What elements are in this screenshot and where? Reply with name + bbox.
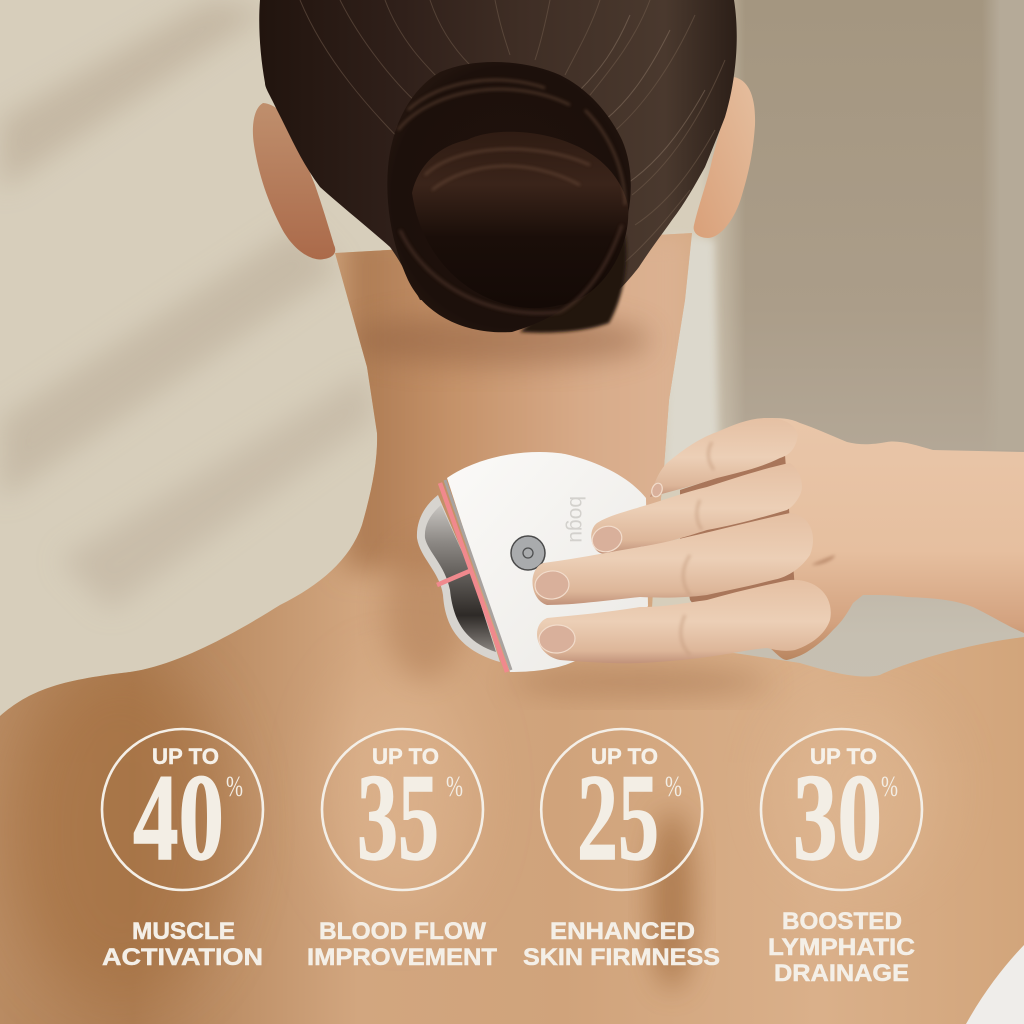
towel corner (966, 945, 1024, 1024)
white body (447, 452, 648, 672)
percent sign: % (226, 770, 243, 803)
badge ring (541, 729, 702, 890)
up to label: UP TO (152, 744, 219, 769)
badge ring (322, 729, 483, 890)
stat: 40% muscle activation (102, 729, 263, 971)
finger gaps shadow (680, 455, 795, 640)
power button (511, 536, 545, 570)
caption (768, 908, 915, 987)
forearm and hand back (720, 418, 1024, 660)
hair bun (387, 62, 631, 332)
stat: 25% enhanced skin firmness (523, 729, 720, 971)
caption: ENHANCED (550, 918, 695, 945)
caption: DRAINAGE (774, 960, 909, 987)
knuckle creases (681, 442, 714, 655)
device (417, 452, 648, 672)
device logo: bogu (565, 496, 588, 543)
nape tuft (520, 235, 627, 333)
value: 30 (793, 749, 882, 886)
ear left (253, 103, 335, 259)
up to label: UP TO (591, 744, 658, 769)
value: 40 (133, 749, 224, 886)
caption: MUSCLE (132, 918, 235, 945)
value: 35 (357, 749, 439, 886)
ear right (694, 77, 755, 238)
stat: 35% blood flow improvement (307, 729, 497, 971)
grey seam (445, 480, 511, 670)
caption (102, 918, 263, 971)
fingers (532, 418, 831, 663)
caption (307, 918, 497, 971)
hair (259, 0, 737, 333)
caption: IMPROVEMENT (307, 944, 497, 971)
percent sign: % (665, 770, 682, 803)
top finger (650, 418, 798, 497)
fourth finger (537, 580, 831, 663)
metal mirror surface (425, 505, 496, 652)
caption (523, 918, 720, 971)
hair strands (300, 0, 725, 262)
pink cross bar (437, 570, 472, 585)
up to label: UP TO (810, 744, 877, 769)
stat: 30% boosted lymphatic drainage (761, 729, 922, 987)
background wall (0, 0, 1024, 676)
caption: BOOSTED (782, 908, 902, 935)
metal head (417, 495, 500, 662)
caption: LYMPHATIC (768, 934, 915, 961)
percent sign: % (881, 770, 898, 803)
badge ring (761, 729, 922, 890)
caption: ACTIVATION (102, 944, 263, 971)
value: 25 (577, 749, 659, 886)
pink light bar (440, 483, 507, 672)
second finger (591, 463, 802, 554)
third finger (532, 513, 813, 605)
caption: SKIN FIRMNESS (523, 944, 720, 971)
caption: BLOOD FLOW (319, 918, 486, 945)
up to label: UP TO (372, 744, 439, 769)
percent sign: % (446, 770, 463, 803)
back and shoulders (0, 230, 1024, 1024)
badge ring (102, 729, 263, 890)
fingernails (534, 482, 664, 654)
